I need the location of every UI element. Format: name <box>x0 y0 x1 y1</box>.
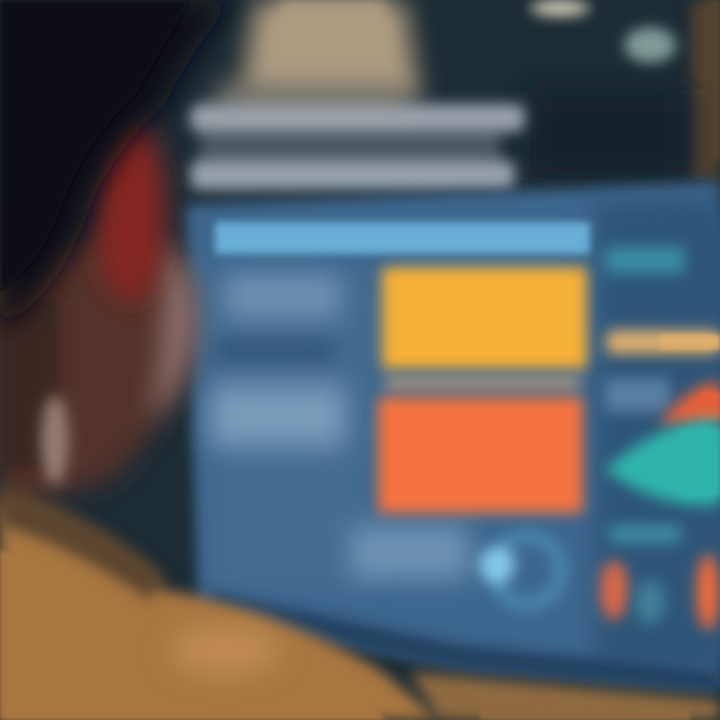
person: ear <box>94 118 166 302</box>
person: face and neck <box>0 240 197 510</box>
person: shoulder in tan shirt <box>0 485 440 720</box>
header bar <box>215 222 590 254</box>
panel: dashboard screen <box>185 182 720 692</box>
blurred heading text <box>190 104 525 190</box>
background: beige figure behind screen <box>215 0 420 115</box>
person: dark hair <box>0 0 235 330</box>
right column: teal header block <box>605 247 685 273</box>
left column text blocks <box>210 275 470 580</box>
right column: small text <box>605 378 670 412</box>
orange panel <box>378 397 583 513</box>
wave chart <box>605 382 720 543</box>
right column: heading in amber <box>606 330 720 354</box>
desk surface <box>410 672 720 720</box>
yellow panel <box>382 267 587 369</box>
beige divider between panels <box>385 375 580 391</box>
donut chart <box>479 536 561 604</box>
small bar charts <box>600 554 720 630</box>
